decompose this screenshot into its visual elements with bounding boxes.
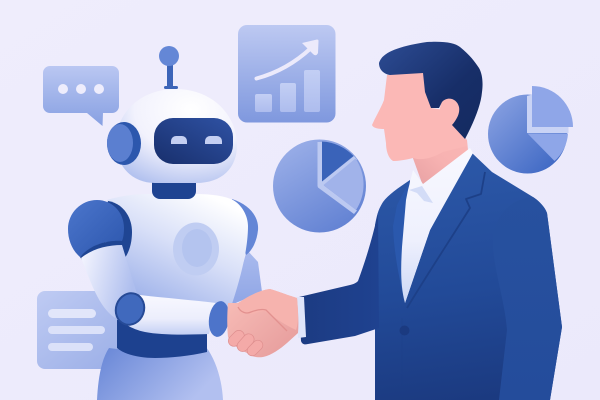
fingers: [226, 328, 265, 358]
robot torso: [107, 194, 248, 326]
robot shoulder: [68, 200, 132, 260]
robot eyes: [171, 136, 222, 144]
robot upper arm: [81, 245, 137, 318]
handshake: [226, 289, 298, 358]
robot: [68, 46, 262, 400]
icon: pie chart centre: [273, 140, 366, 232]
man collar fold: [409, 186, 433, 203]
robot ear: [107, 122, 141, 165]
robot antenna: [159, 46, 179, 89]
businessman: [297, 42, 562, 400]
man button: [400, 326, 410, 336]
man suit right arm: [493, 197, 562, 400]
man neck: [410, 120, 468, 186]
icon: growth chart card: [238, 25, 336, 122]
man suit seams: [402, 172, 485, 400]
man face: [372, 72, 467, 161]
man hair: [379, 42, 483, 139]
robot far shoulder: [232, 199, 258, 255]
robot neck: [152, 180, 196, 199]
robot forearm: [122, 295, 216, 335]
man suit body: [375, 153, 562, 400]
robot head: [116, 89, 237, 183]
man shirt: [401, 148, 473, 303]
man ear: [438, 92, 462, 126]
robot wrist: [207, 300, 231, 338]
robot chest emblem: [173, 222, 219, 276]
robot elbow: [110, 288, 150, 330]
man sleeve shaded: [299, 213, 379, 344]
icon: pie chart right: [488, 86, 573, 174]
man lapel left: [393, 180, 410, 303]
robot visor: [154, 118, 233, 164]
robot lower body: [97, 347, 223, 400]
robot far arm: [231, 250, 262, 305]
man cuff: [297, 297, 306, 338]
icon: speech bubble: [43, 66, 119, 126]
robot belt: [117, 320, 207, 358]
icon: text note card: [37, 291, 137, 369]
